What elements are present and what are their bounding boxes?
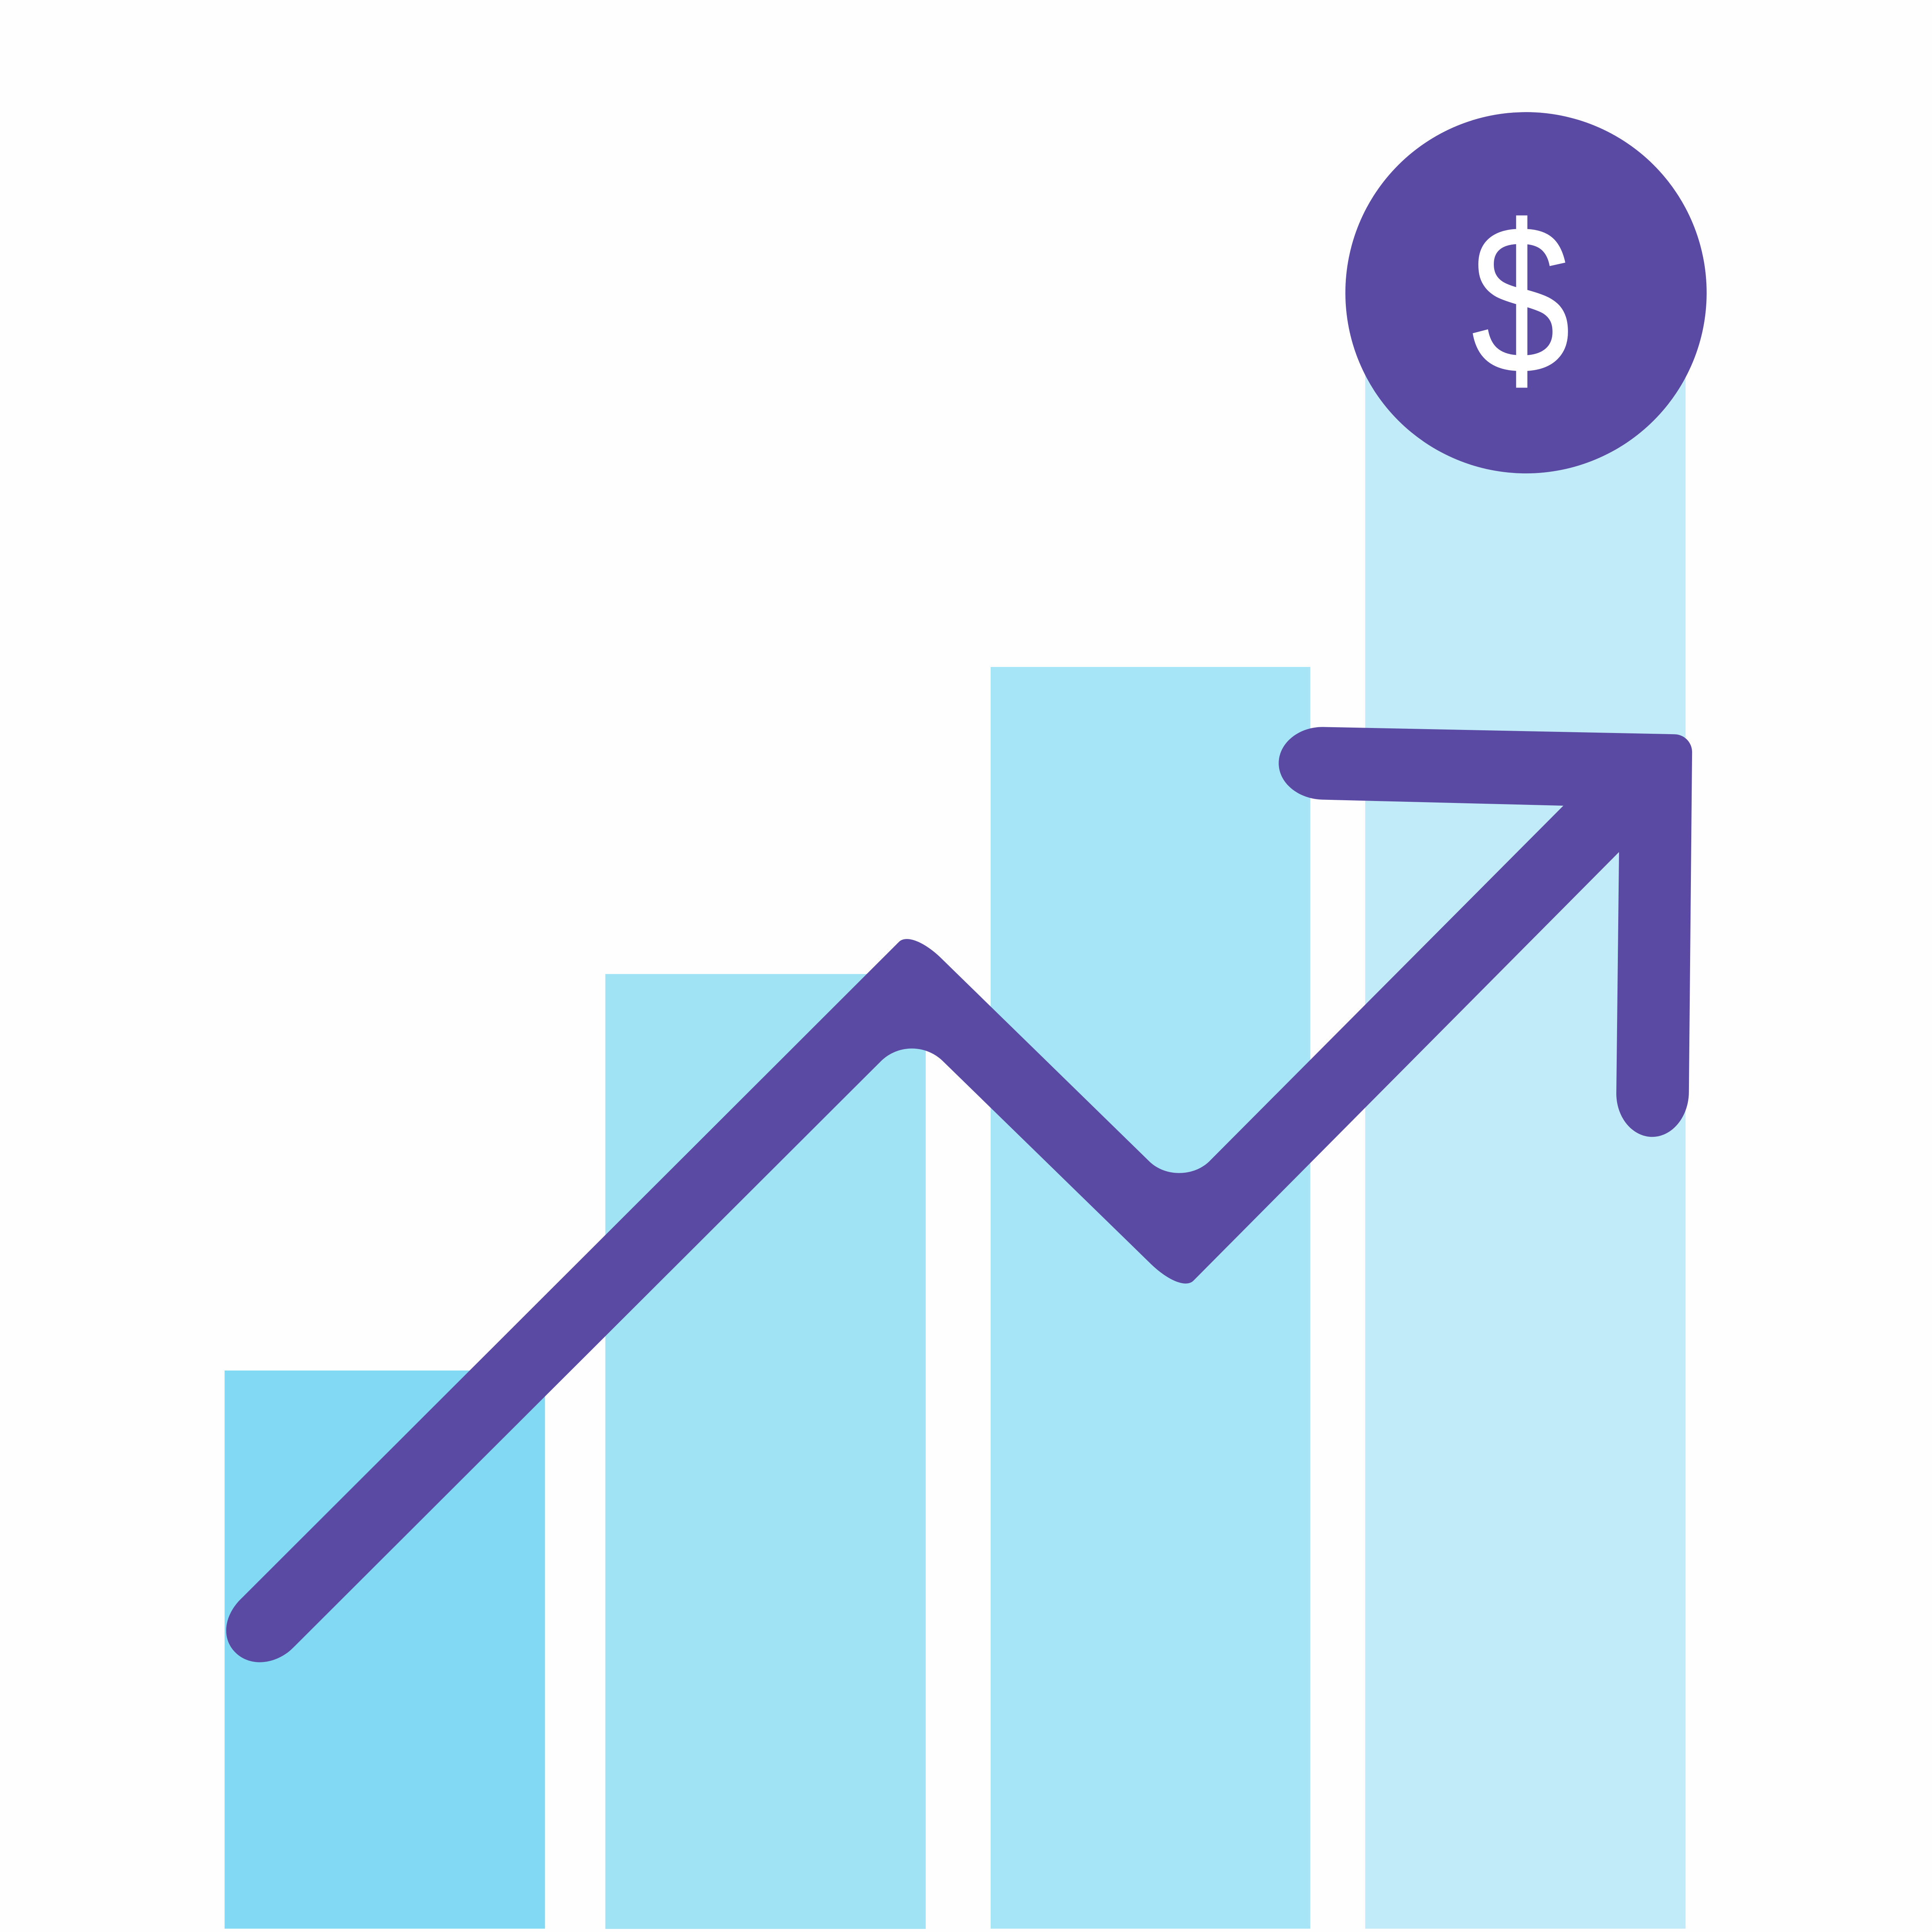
dollar sign: $: [1471, 180, 1571, 418]
coin circle: [1345, 112, 1707, 473]
bar 4: [1365, 345, 1685, 1929]
bar 3: [991, 667, 1310, 1929]
bar 1: [224, 1371, 545, 1929]
bar 2: [605, 974, 926, 1929]
icon: rising arrow: [226, 727, 1692, 1662]
bar chart: [224, 345, 1685, 1929]
icon: dollar coin: [1345, 112, 1707, 473]
